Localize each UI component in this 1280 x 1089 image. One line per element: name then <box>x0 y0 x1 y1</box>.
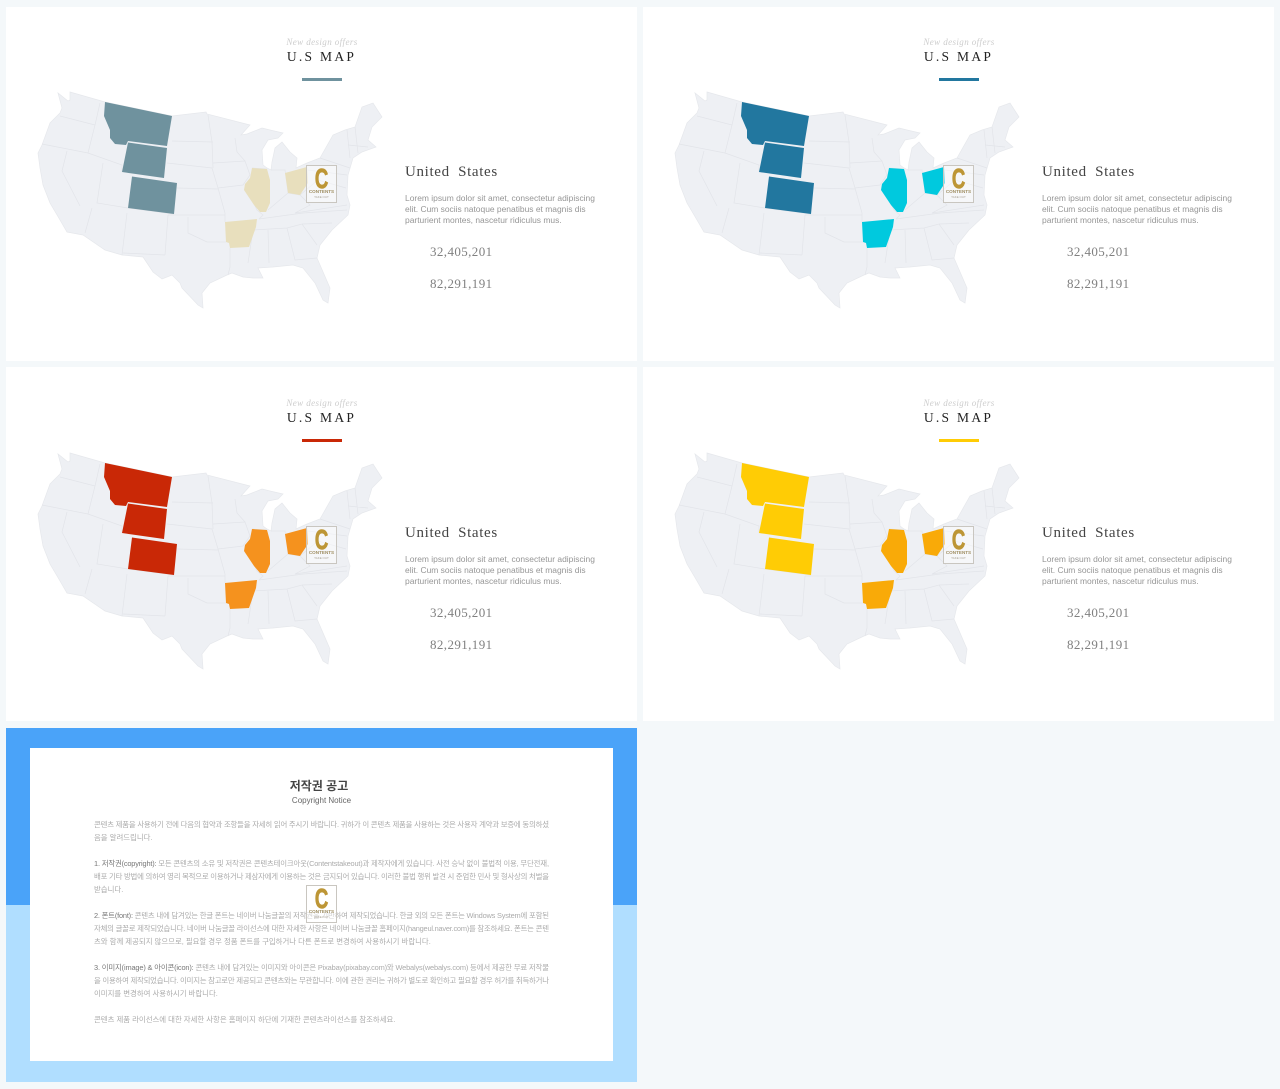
title accent bar <box>939 78 979 81</box>
map: United States <box>674 452 1020 670</box>
eyebrow text: New design offers <box>923 398 995 408</box>
watermark logo <box>943 165 974 203</box>
title accent bar <box>302 78 342 81</box>
title: U.S MAP <box>924 410 993 425</box>
body text <box>405 193 595 225</box>
title: U.S MAP <box>287 410 356 425</box>
statistic one: 32,405,201 <box>1067 244 1130 259</box>
heading: United States <box>1042 164 1135 180</box>
body text: parturient montes, nascetur ridiculus mus. <box>405 576 562 586</box>
body text: parturient montes, nascetur ridiculus mus. <box>405 215 562 225</box>
watermark logo <box>306 885 337 923</box>
notice body text: 츠와 함께 제공되지 않으므로, 필요할 경우 정품 폰트를 구입하거나 다른 폰트로 변경하여 사용하시기 바랍니다. <box>94 937 431 946</box>
map: United States <box>38 92 382 308</box>
watermark logo: CONTENTS <box>946 550 971 555</box>
eyebrow text: New design offers <box>286 37 358 47</box>
map: United States <box>38 452 382 670</box>
watermark logo <box>943 526 974 564</box>
statistic two: 82,291,191 <box>1067 276 1130 291</box>
body text: Lorem ipsum dolor sit amet, consectetur adipiscing <box>405 554 595 564</box>
notice body text: 음을 알려드립니다. <box>94 833 153 842</box>
notice body text: 1. 저작권(copyright): 모든 콘텐츠의 소유 및 저작권은 콘텐츠테이크아웃(Contentstakeout)과 제작자에게 있습니다. 사전 승낙 없이 불법적 이용, 무단전재, <box>94 859 549 868</box>
title accent bar <box>939 439 979 442</box>
body text: parturient montes, nascetur ridiculus mus. <box>1042 215 1199 225</box>
notice body text: 콘텐츠 제품 라이선스에 대한 자세한 사항은 홈페이지 하단에 기재한 콘텐츠라이선스를 참조하세요. <box>94 1015 395 1024</box>
body text: Lorem ipsum dolor sit amet, consectetur adipiscing <box>405 193 595 203</box>
eyebrow text: New design offers <box>923 37 995 47</box>
panel: U.S map, slate and sand <box>6 7 637 361</box>
watermark logo: TAKE OUT <box>951 195 966 199</box>
body text <box>1042 193 1232 225</box>
map: United States <box>674 92 1020 308</box>
panel: U.S map, red and orange <box>6 368 637 721</box>
panel: copyright notice <box>6 728 637 1082</box>
body text: elit. Cum sociis natoque penatibus et magnis dis <box>405 565 586 575</box>
notice body text <box>94 820 549 1024</box>
watermark logo: TAKE OUT <box>314 556 329 560</box>
watermark logo: CONTENTS <box>309 550 334 555</box>
body text <box>405 554 595 586</box>
notice subtitle: Copyright Notice <box>292 796 352 805</box>
watermark logo: CONTENTS <box>309 189 334 194</box>
heading: United States <box>1042 525 1135 541</box>
statistic two: 82,291,191 <box>1067 637 1130 652</box>
watermark logo: TAKE OUT <box>314 915 329 919</box>
watermark logo <box>306 526 337 564</box>
body text: Lorem ipsum dolor sit amet, consectetur adipiscing <box>1042 554 1232 564</box>
notice body text: 을 이용하여 제작되었습니다. 이미지는 참고로만 제공되고 콘텐츠와는 무관합니다. 이에 관한 권리는 귀하가 별도로 확인하고 필요할 경우 허가를 취득하거나 <box>94 976 549 985</box>
title: U.S MAP <box>287 49 356 64</box>
statistic one: 32,405,201 <box>430 605 492 620</box>
notice body text: 콘텐츠 제품을 사용하기 전에 다음의 협약과 조항들을 자세히 읽어 주시기 바랍니다. 귀하가 이 콘텐츠 제품을 사용하는 것은 사용자 계약과 보증에 동의하셨 <box>94 820 549 829</box>
body text: parturient montes, nascetur ridiculus mus. <box>1042 576 1199 586</box>
statistic two: 82,291,191 <box>430 276 492 291</box>
watermark logo: CONTENTS <box>946 189 971 194</box>
statistic one: 32,405,201 <box>1067 605 1130 620</box>
body text: Lorem ipsum dolor sit amet, consectetur adipiscing <box>1042 193 1232 203</box>
body text: elit. Cum sociis natoque penatibus et magnis dis <box>1042 565 1223 575</box>
heading: United States <box>405 525 498 541</box>
eyebrow text: New design offers <box>286 398 358 408</box>
statistic two: 82,291,191 <box>430 637 492 652</box>
notice body text: 3. 이미지(image) & 아이콘(icon): 콘텐츠 내에 담겨있는 이미지와 아이콘은 Pixabay(pixabay.com)와 Webalys(webalys.com) 등에서 제공한 무료 저작물 <box>94 963 549 972</box>
watermark logo <box>306 165 337 203</box>
body text: elit. Cum sociis natoque penatibus et magnis dis <box>1042 204 1223 214</box>
statistic one: 32,405,201 <box>430 244 492 259</box>
panel: U.S map, blue and cyan <box>643 7 1274 361</box>
notice body text: 2. 폰트(font): 콘텐츠 내에 담겨있는 한글 폰트는 네이버 나눔글꼴의 저작권을 기반하여 제작되었습니다. 한글 외의 모든 폰트는 Windows System에 포함된 <box>94 911 549 920</box>
notice title: 저작권 공고 <box>290 778 348 793</box>
notice card <box>30 748 613 1061</box>
panel: U.S map, yellow and amber <box>643 368 1274 721</box>
title: U.S MAP <box>924 49 993 64</box>
watermark logo: TAKE OUT <box>951 556 966 560</box>
body text <box>1042 554 1232 586</box>
title accent bar <box>302 439 342 442</box>
notice body text: 이미지를 변경하여 사용하시기 바랍니다. <box>94 989 218 998</box>
watermark logo: CONTENTS <box>309 909 334 914</box>
notice body text: 자체의 글꼴로 제작되었습니다. 네이버 나눔글꼴 라이선스에 대한 자세한 사항은 네이버 나눔글꼴 홈페이지(hangeul.naver.com)를 참조하세요. 폰트는 콘텐 <box>94 924 549 933</box>
notice body text: 받습니다. <box>94 885 123 894</box>
watermark logo: TAKE OUT <box>314 195 329 199</box>
heading: United States <box>405 164 498 180</box>
notice body text: 배포 기타 방법에 의하여 영리 목적으로 이용하거나 제삼자에게 이용하는 것은 금지되어 있습니다. 이러한 불법 행위 발견 시 준엄한 민사 및 형사상의 처벌을 <box>94 872 549 881</box>
body text: elit. Cum sociis natoque penatibus et magnis dis <box>405 204 586 214</box>
